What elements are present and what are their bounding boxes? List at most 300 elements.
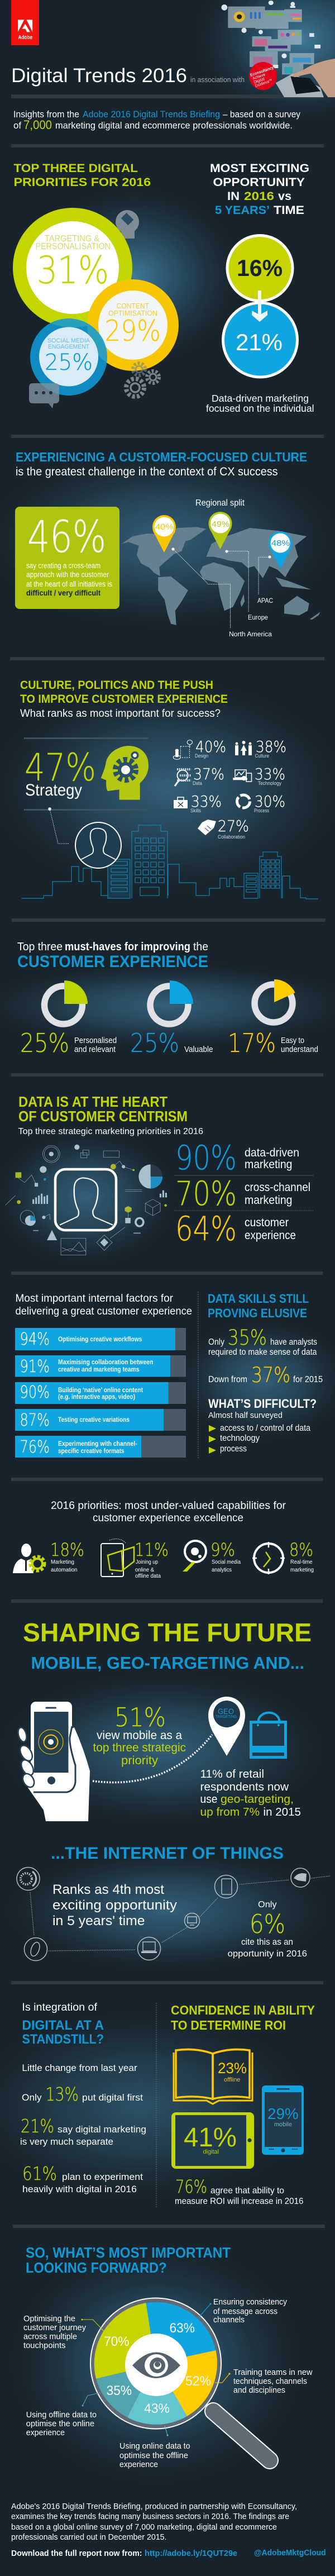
- stat: real-time marketing 8%: 8%: [289, 1539, 313, 1560]
- text: ranks as 4th: in 5 years' time: [52, 1913, 145, 1929]
- heading: must-haves: must-haves for improving: [65, 941, 190, 953]
- panel: looking forward: [23, 2244, 313, 2469]
- bubble: social media engagement 25%: [30, 318, 107, 396]
- label: training teams: and disciplines: [233, 2386, 285, 2395]
- heading: digital at a standstill: Is integration of: [22, 2002, 98, 2013]
- stat: 35% have analysts: 35%: [228, 1326, 267, 1350]
- list: difficulties: technology: [220, 1434, 260, 1443]
- bar: 76% experimenting with formats: specific creative formats: [58, 1447, 125, 1455]
- list: difficulties: access to / control of data: [220, 1423, 310, 1433]
- heading: most exciting opportunity: vs: [278, 189, 291, 203]
- chart: personalised and relevant 25%: Personalised: [74, 1036, 117, 1045]
- text: little change: Little change from last year: [22, 2063, 137, 2073]
- stat: 11% geo-targeting: geo-targeting,: [221, 1793, 294, 1806]
- icon: gears: [126, 363, 159, 397]
- bubble: targeting and personalisation 31%: [13, 208, 132, 327]
- leader line: strategy to person: [48, 807, 69, 844]
- icon: speech bubble: [29, 383, 59, 408]
- stat: marketing automation 18%: [13, 1539, 84, 1573]
- region labels: APAC: [257, 598, 273, 604]
- footer text: based on a global online survey of 7,000 marketing, digital and ecommerce: [11, 2523, 277, 2532]
- heading: confidence: [171, 2003, 315, 2032]
- icon: puzzle head: [116, 210, 139, 239]
- stat: technology 33%: 33%: [255, 765, 285, 783]
- bar: 91% maximising collaboration: Maximising collaboration between: [58, 1358, 153, 1366]
- icon: person in circle: [75, 822, 121, 868]
- stat: 35% have analysts: have analysts: [270, 1337, 317, 1347]
- heading: shaping the future: [23, 1618, 312, 1673]
- chart: personalised and relevant 25%: [20, 980, 117, 1058]
- heading: what's difficult: [208, 1397, 317, 1420]
- heading: digital at a standstill: STANDSTILL?: [22, 2032, 104, 2047]
- pin: North America 40%: 40%: [155, 522, 174, 532]
- panel: top three digital priorities: [13, 162, 179, 408]
- pin: Europe 49%: [209, 512, 232, 549]
- Econsultancy badge: Achieve: [252, 72, 266, 81]
- icon: tablet, digital 41%: digital: [203, 2149, 219, 2155]
- bar: 76% experimenting with formats: 76%: [20, 1437, 50, 1457]
- chart: valuable 25%: [130, 980, 213, 1058]
- bar: 94% optimising creative workflows: Optimising creative workflows: [58, 1335, 142, 1343]
- heading: most exciting opportunity: IN: [227, 189, 240, 203]
- bubble: content optimisation 29%: CONTENT: [116, 302, 149, 310]
- pin: Europe 49%: 49%: [212, 520, 229, 529]
- stat: 47% strategy: 47%: [25, 746, 96, 790]
- intro text: of: [13, 121, 21, 131]
- icon: shopping bag: [250, 1713, 287, 1759]
- icon: book, offline 23%: 23%: [218, 2060, 247, 2077]
- chart: magnifier pie: 35%: [107, 2383, 132, 2398]
- arrow: dotted path from phone to pin: [93, 1735, 212, 1782]
- rule lines: strategy: [24, 737, 149, 811]
- panel: under-valued capabilities: [13, 1499, 314, 1579]
- stat: 13% digital first: Only: [22, 2092, 42, 2103]
- bar: 87% testing creative variations: 87%: [20, 1411, 50, 1430]
- footer text: professionals carried out in December 2015.: [11, 2533, 166, 2542]
- stat: 76% agree: measure ROI will increase in 2016: [175, 2197, 303, 2206]
- stat: 51% mobile: priority: [121, 1754, 159, 1767]
- stat: real-time marketing 8%: Real-time: [290, 1559, 313, 1565]
- label: optimising the customer journey: customer journey: [23, 2323, 87, 2332]
- caption: data-driven marketing: Data-driven marketing: [212, 393, 309, 404]
- Econsultancy badge: Digital: [253, 76, 265, 84]
- bar: 94% optimising creative workflows: 94%: [20, 1330, 50, 1349]
- leader lines: regions: [173, 549, 270, 628]
- bar: 91% maximising collaboration: 91%: [20, 1357, 50, 1377]
- Econsultancy badge: Econsultancy: [250, 65, 275, 78]
- icon: virtual reality headset: [291, 1868, 310, 1887]
- stat: social media analytics 9%: [183, 1539, 241, 1573]
- bar: 90% building native content: Building ‘native’ online content: [58, 1386, 143, 1394]
- heading: digital at a standstill: DIGITAL AT A: [22, 2018, 104, 2033]
- stat: only 6%: [228, 1900, 307, 1959]
- heading: must-haves: Top three: [17, 941, 63, 953]
- icon: tablet, digital 41%: [171, 2112, 254, 2169]
- icon: geo-targeting pin: [208, 1697, 245, 1756]
- stat: real-time marketing 8%: marketing: [290, 1566, 314, 1573]
- stat: 11% geo-targeting: use: [200, 1793, 218, 1806]
- bar: 91% maximising collaboration: [15, 1355, 186, 1377]
- heading: confidence: CONFIDENCE IN ABILITY: [171, 2003, 315, 2017]
- icon: phone, mobile 29%: 29%: [267, 2105, 299, 2122]
- heading: data at the heart: DATA IS AT THE HEART: [18, 1093, 168, 1110]
- label: using offline data: experience: [26, 2429, 65, 2437]
- stat: only 6%: 6%: [250, 1909, 285, 1939]
- stat: collaboration 27%: 27%: [218, 817, 249, 835]
- intro text: [13, 109, 301, 132]
- icon: hand holding phone: [17, 1702, 90, 1821]
- stat: 51% mobile: [93, 1702, 186, 1767]
- callout: 46%: 46%: [27, 512, 106, 563]
- leader lines: labels: [82, 2303, 230, 2436]
- label: training teams: [233, 2368, 313, 2395]
- label: ensuring consistency: channels: [213, 2316, 245, 2325]
- icon: smart ring: [25, 1937, 47, 1961]
- stat: process 30%: 30%: [255, 792, 285, 811]
- stat: 90% data-driven marketing: [175, 1139, 299, 1178]
- chart: easy to understand 17%: [228, 979, 318, 1058]
- stat: skills 33%: Skills: [190, 808, 201, 814]
- heading: most exciting opportunity: TIME: [274, 203, 304, 217]
- stat: 70% cross-channel marketing: 70%: [175, 1174, 237, 1213]
- stat: 70% cross-channel marketing: [175, 1174, 310, 1213]
- label: using offline data: Using offline data to: [26, 2411, 97, 2420]
- stat: 90% data-driven marketing: 90%: [175, 1139, 237, 1178]
- chart: easy to understand 17%: Easy to: [281, 1036, 304, 1045]
- stat: joining up online and offline data 11%: offline data: [135, 1573, 161, 1579]
- heading: data skills: PROVING ELUSIVE: [208, 1306, 307, 1320]
- heading: internal factors: [16, 1292, 192, 1317]
- intro text: – based on a survey: [223, 109, 301, 120]
- callout: 46%: difficult / very difficult: [26, 588, 100, 597]
- label: regional split: Regional split: [195, 498, 245, 508]
- region labels: Europe: [248, 615, 268, 621]
- heading: data at the heart: OF CUSTOMER CENTRISM: [18, 1108, 188, 1125]
- heading: most exciting opportunity: [210, 161, 309, 217]
- callout: 46%: say creating a cross-team: [26, 561, 100, 570]
- footer text: Adobe's 2016 Digital Trends Briefing, produced in partnership with Econsultancy,: [11, 2502, 297, 2511]
- stat: only 6%: cite this as an: [241, 1937, 293, 1947]
- callout: 46%: [15, 507, 119, 609]
- icon: geo-targeting pin: GEO: [218, 1707, 234, 1716]
- stat: 64% customer experience: 64%: [175, 1210, 237, 1249]
- stat: 51% mobile: 51%: [114, 1702, 166, 1732]
- callout: 46%: approach with the customer: [26, 570, 109, 579]
- stat: 35% have analysts: [208, 1326, 317, 1357]
- stat: process 30%: [237, 792, 285, 814]
- stat: data 37%: Data: [193, 780, 203, 787]
- stat: design 40%: 40%: [195, 737, 226, 756]
- skyline: left buildings: [22, 825, 244, 898]
- text: ranks as 4th: [52, 1882, 178, 1929]
- stat: skills 33%: [174, 792, 222, 814]
- chart: magnifier pie: 43%: [144, 2401, 170, 2416]
- chart: valuable 25%: 25%: [130, 1028, 179, 1058]
- icon: book, offline 23%: [174, 2049, 252, 2104]
- footer text: examines the key trends facing many business sectors in 2016. The findings are: [11, 2512, 289, 2521]
- stat: 64% customer experience: customer: [245, 1216, 289, 1229]
- stat: 35% have analysts: required to make sense of data: [208, 1347, 317, 1357]
- stat: 64% customer experience: experience: [245, 1229, 296, 1242]
- stat: 16% in 2016: 16%: [237, 255, 283, 281]
- stat: social media analytics 9%: analytics: [212, 1566, 232, 1573]
- icon: smartwatch: [17, 1867, 40, 1891]
- text: ranks as 4th: Ranks as 4th most: [52, 1882, 164, 1897]
- heading: top three priorities: PRIORITIES FOR 2016: [13, 176, 151, 189]
- heading: most exciting opportunity: MOST EXCITING: [210, 161, 309, 175]
- stat: skills 33%: 33%: [191, 792, 222, 811]
- stat: 76% agree: 76%: [175, 2176, 207, 2197]
- stat: real-time marketing 8%: [252, 1539, 314, 1574]
- stat: 76% agree: agree that ability to: [210, 2186, 284, 2196]
- stat: 90% data-driven marketing: data-driven: [245, 1146, 299, 1159]
- world map: [122, 527, 320, 625]
- stat: data 37%: 37%: [193, 765, 224, 783]
- intro text: Adobe 2016 Digital Trends Briefing: [83, 109, 220, 120]
- heading: confidence: TO DETERMINE ROI: [171, 2018, 286, 2032]
- section dividers: [10, 94, 326, 2228]
- heading: customer-focused culture: EXPERIENCING A CUSTOMER-FOCUSED CULTURE: [16, 450, 307, 464]
- chart: personalised and relevant 25%: 25%: [20, 1028, 69, 1058]
- stat: 21% in five years: [223, 303, 297, 377]
- label: optimising the customer journey: touchpoints: [23, 2341, 66, 2350]
- panel: data skills still proving elusive: [208, 1292, 323, 1454]
- stat: marketing automation 18%: 18%: [50, 1539, 84, 1560]
- label: using offline data: optimise the online: [26, 2420, 94, 2429]
- stat: 51% mobile: top three strategic: [93, 1741, 186, 1754]
- bar: 76% experimenting with formats: [15, 1436, 186, 1458]
- stat: 13% digital first: [22, 2083, 143, 2105]
- panel: culture, politics and the push: [20, 679, 318, 899]
- panel: internal factors: [15, 1292, 192, 1458]
- icon: geo-targeting pin: TARGETING: [216, 1715, 237, 1719]
- chart: easy to understand 17%: understand: [281, 1045, 318, 1054]
- icon: laptop: [137, 1937, 161, 1960]
- list: difficulties: [209, 1423, 310, 1454]
- stat: marketing automation 18%: automation: [51, 1566, 78, 1573]
- heading: customer-focused culture: [16, 450, 307, 478]
- region labels: North America: [229, 631, 272, 638]
- heading: internal factors: delivering a great customer experience: [16, 1305, 192, 1317]
- stat: down from 37%: for 2015: [293, 1375, 323, 1384]
- stat: technology 33%: Technology: [258, 780, 281, 787]
- stat: marketing automation 18%: Marketing: [51, 1559, 74, 1565]
- stat: collaboration 27%: Collaboration: [218, 834, 245, 840]
- label: ensuring consistency: [213, 2298, 288, 2325]
- skyline: right buildings: [244, 852, 318, 899]
- bubble: content optimisation 29%: [87, 279, 179, 371]
- icon: book, offline 23%: offline: [224, 2077, 240, 2083]
- Adobe logo block: Adobe: [18, 35, 32, 41]
- stat: 70% cross-channel marketing: cross-channel: [245, 1181, 310, 1194]
- bar: 91% maximising collaboration: creative and marketing teams: [58, 1365, 140, 1373]
- stat: 13% digital first: put digital first: [82, 2092, 143, 2103]
- stat: 21% very much separate: 21%: [21, 2115, 54, 2137]
- stat: 90% data-driven marketing: marketing: [245, 1158, 293, 1171]
- heading: 2016 priorities: 2016 priorities: most under-valued capabilities for: [51, 1499, 286, 1512]
- icon: smartphone: [214, 1875, 238, 1898]
- stat: process 30%: Process: [254, 808, 269, 814]
- panel: digital at a standstill: [20, 2002, 146, 2194]
- heading: customer-focused culture: is the greatest challenge in the context of CX success: [16, 465, 278, 478]
- stat: 11% geo-targeting: up from 7%: [200, 1806, 260, 1818]
- heading: culture and politics: CULTURE, POLITICS AND THE PUSH: [20, 679, 213, 692]
- caption: data-driven marketing: [206, 393, 314, 414]
- stat: 61% plan to experiment: [22, 2163, 143, 2194]
- bar: 87% testing creative variations: [15, 1409, 186, 1431]
- stat: culture 38%: 38%: [256, 737, 286, 756]
- intro text: Insights from the: [13, 109, 79, 120]
- heading: culture and politics: What ranks as most important for success?: [20, 707, 221, 720]
- panel: most exciting opportunity: [206, 161, 314, 414]
- stat: only 6%: Only: [258, 1900, 277, 1910]
- heading: culture and politics: [20, 679, 228, 720]
- bar: 90% building native content: [15, 1382, 186, 1404]
- panel: customer-focused culture: [15, 450, 320, 638]
- region labels: [229, 598, 273, 638]
- stat: 51% mobile: view mobile as a: [97, 1729, 182, 1742]
- footer text: Download the full report now from:: [11, 2549, 142, 2558]
- bubble: targeting and personalisation 31%: PERSONALISATION: [36, 242, 111, 251]
- stat: down from 37%: Down from: [208, 1375, 247, 1384]
- heading: shaping the future: SHAPING THE FUTURE: [23, 1618, 312, 1647]
- heading: internal factors: Most important internal factors for: [16, 1292, 173, 1304]
- heading: shaping the future: MOBILE, GEO-TARGETING AND...: [31, 1653, 304, 1673]
- bar: 90% building native content: (e.g. interactive apps, video): [58, 1393, 135, 1401]
- heading: internet of things: ...THE INTERNET OF THINGS: [51, 1844, 284, 1863]
- heading: top three priorities: [13, 162, 151, 189]
- label: optimising the customer journey: Optimising the: [23, 2315, 75, 2323]
- stat: joining up online and offline data 11%: 11%: [135, 1539, 169, 1560]
- stat: technology 33%: [233, 765, 285, 787]
- chart: personalised and relevant 25%: and relevant: [74, 1045, 116, 1054]
- stat: design 40%: Design: [195, 753, 208, 759]
- pin: APAC 48%: [269, 531, 292, 569]
- stat: 21% in five years: 21%: [236, 329, 283, 355]
- panel: internet of things: [17, 1844, 330, 1961]
- bubble: content optimisation 29%: 29%: [105, 315, 161, 348]
- stat: 21% very much separate: [20, 2115, 146, 2147]
- stat: 16% in 2016: [227, 236, 293, 301]
- footer text: @AdobeMktgCloud: [254, 2549, 326, 2558]
- footer text: [11, 2502, 326, 2558]
- icon: magnifier handle: [213, 2411, 270, 2460]
- stat: 61% plan to experiment: heavily with digital in 2016: [22, 2184, 137, 2194]
- stat: 70% cross-channel marketing: marketing: [245, 1194, 293, 1207]
- stat: 11% geo-targeting: [200, 1768, 301, 1818]
- label: using online data: [119, 2442, 190, 2469]
- heading: data skills: DATA SKILLS STILL: [208, 1292, 309, 1306]
- chart: magnifier pie: 63%: [170, 2321, 195, 2336]
- bar: 76% experimenting with formats: Experimenting with channel-: [58, 1440, 137, 1447]
- intro text: 7,000: [23, 118, 52, 132]
- heading: what's difficult: Almost half surveyed: [208, 1411, 283, 1420]
- stat: 61% plan to experiment: 61%: [22, 2163, 57, 2184]
- bar: 94% optimising creative workflows: [15, 1328, 186, 1350]
- title: Digital Trends 2016: [11, 65, 187, 87]
- chart: magnifier pie: [90, 2297, 222, 2429]
- stat: joining up online and offline data 11%: [101, 1539, 169, 1579]
- stat: joining up online and offline data 11%: Joining up: [136, 1559, 158, 1565]
- heading: most exciting opportunity: 5 YEARS’: [215, 203, 270, 217]
- stat: 11% geo-targeting: 11% of retail: [200, 1768, 264, 1780]
- icon: customer profile with data icons: [6, 1145, 167, 1255]
- heading: looking forward: LOOKING FORWARD?: [26, 2259, 166, 2276]
- panel: top three must-haves: [17, 941, 318, 1058]
- stat: joining up online and offline data 11%: online &: [135, 1566, 154, 1573]
- text: ranks as 4th: exciting opportunity: [52, 1898, 178, 1913]
- stat: culture 38%: [235, 737, 286, 759]
- label: training teams: Training teams in new: [233, 2368, 313, 2377]
- title: in association with: [190, 75, 245, 84]
- panel: confidence in ability to determine ROI: [171, 2003, 315, 2206]
- label: ensuring consistency: Ensuring consistency: [213, 2298, 288, 2307]
- stat: down from 37%: [208, 1363, 323, 1387]
- heading: must-haves: CUSTOMER EXPERIENCE: [17, 953, 208, 971]
- bubble: content optimisation 29%: OPTIMISATION: [108, 309, 157, 317]
- Adobe logo block: [11, 0, 39, 45]
- chart: valuable 25%: Valuable: [184, 1045, 213, 1054]
- Econsultancy badge: Excellence™: [254, 78, 273, 88]
- heading: 2016 priorities: [51, 1499, 286, 1524]
- heading: top three priorities: TOP THREE DIGITAL: [13, 162, 138, 175]
- heading: digital at a standstill: [22, 2002, 104, 2047]
- Econsultancy badge: [249, 62, 279, 90]
- stat: 61% plan to experiment: plan to experiment: [62, 2172, 143, 2182]
- label: ensuring consistency: of message across: [213, 2307, 277, 2316]
- stat: 13% digital first: 13%: [46, 2083, 79, 2105]
- bubble: social media engagement 25%: 25%: [45, 350, 93, 375]
- heading: most exciting opportunity: OPPORTUNITY: [213, 175, 305, 189]
- chart: magnifier pie: 52%: [185, 2374, 211, 2389]
- label: using online data: experience: [119, 2460, 158, 2469]
- header artwork: floating dashboards and hand on tablet: [221, 1, 335, 97]
- heading: most exciting opportunity: 2016: [244, 189, 274, 203]
- icon: tablet, digital 41%: 41%: [184, 2123, 237, 2153]
- panel: data at the heart of customer centrism: [6, 1093, 314, 1255]
- icon: monitor: [184, 1913, 200, 1929]
- stat: culture 38%: Culture: [255, 753, 269, 759]
- stat: social media analytics 9%: 9%: [210, 1539, 235, 1560]
- icon: eye: [132, 2352, 180, 2378]
- heading: data skills: [208, 1292, 309, 1320]
- bubble: targeting and personalisation 31%: 31%: [37, 249, 109, 293]
- heading: must-haves: the: [193, 941, 208, 953]
- dots: region markers: [172, 547, 271, 559]
- stat: only 6%: opportunity in 2016: [228, 1949, 307, 1959]
- stat: data 37%: [175, 765, 224, 787]
- label: using online data: Using online data to: [119, 2442, 190, 2451]
- icon: phone, mobile 29%: mobile: [274, 2121, 292, 2128]
- stat: 11% geo-targeting: in 2015: [264, 1806, 301, 1818]
- stat: 21% very much separate: is very much separate: [20, 2136, 113, 2147]
- bar: 87% testing creative variations: Testing creative variations: [58, 1416, 130, 1423]
- stat: 76% agree: [175, 2176, 303, 2206]
- stat: collaboration 27%: [198, 817, 249, 840]
- chart: magnifier pie: 70%: [104, 2334, 130, 2349]
- label: using online data: optimise the offline: [119, 2451, 188, 2460]
- stat: social media analytics 9%: Social media: [212, 1559, 241, 1565]
- stat: 21% very much separate: say digital marketing: [58, 2124, 146, 2135]
- pin: North America 40%: [152, 515, 176, 553]
- heading: data at the heart: [18, 1093, 203, 1136]
- bubble: social media engagement 25%: SOCIAL MEDIA: [47, 337, 90, 344]
- connector lines: devices: [30, 1876, 330, 1951]
- label: training teams: techniques, channels: [233, 2377, 307, 2386]
- stat: 11% geo-targeting: respondents now: [200, 1780, 289, 1793]
- icon: strategy head with gears: [101, 746, 149, 800]
- list: difficulties: process: [220, 1444, 247, 1454]
